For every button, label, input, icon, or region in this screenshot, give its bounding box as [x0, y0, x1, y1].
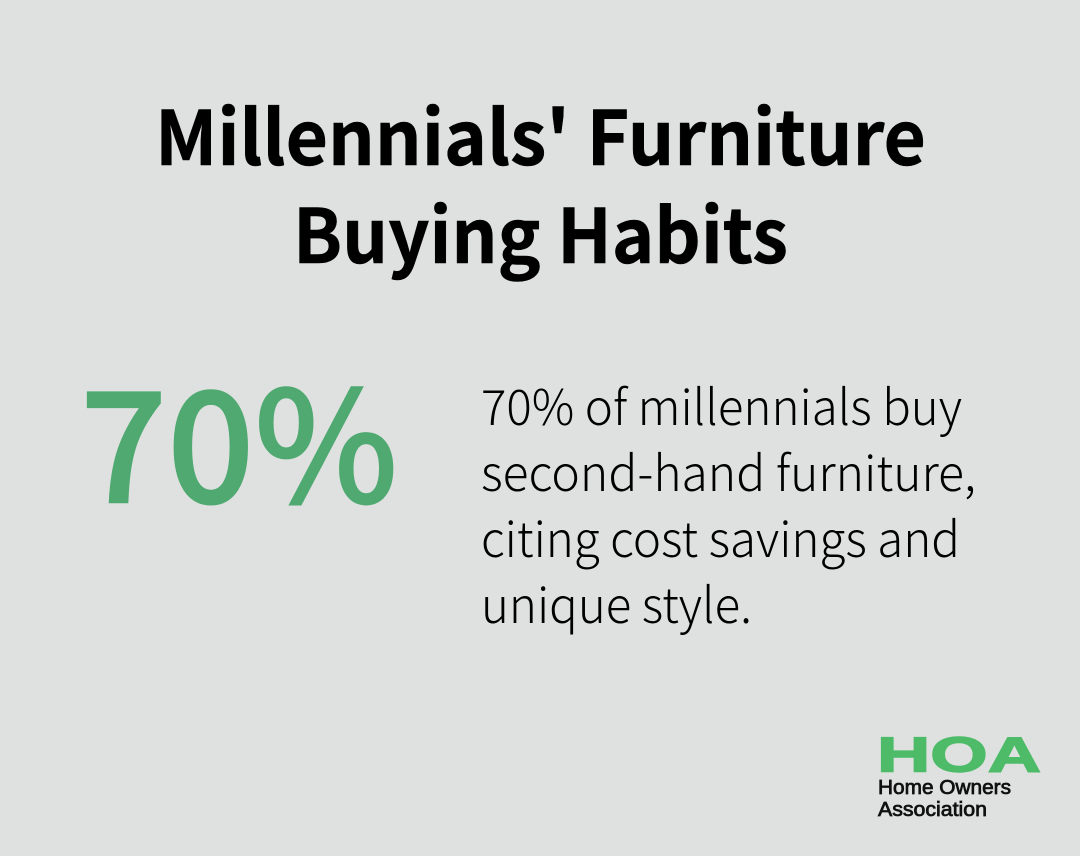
- logo wordmark: [878, 777, 1011, 821]
- description text: unique style.: [481, 567, 752, 638]
- description text: second-hand furniture,: [481, 435, 976, 506]
- description text: [481, 369, 976, 638]
- logo mark: HOA: HOA: [877, 728, 1041, 782]
- description text: citing cost savings and: [481, 501, 960, 572]
- title: Millennials' Furniture: [155, 78, 926, 187]
- logo wordmark: Home Owners: [878, 777, 1011, 799]
- logo: Home Owners Association: [877, 728, 1041, 821]
- description text: 70% of millennials buy: [481, 369, 962, 440]
- title: [155, 78, 926, 285]
- big statistic: 70%: 70%: [80, 324, 398, 548]
- title: Buying Habits: [293, 176, 788, 285]
- logo wordmark: Association: [878, 799, 987, 821]
